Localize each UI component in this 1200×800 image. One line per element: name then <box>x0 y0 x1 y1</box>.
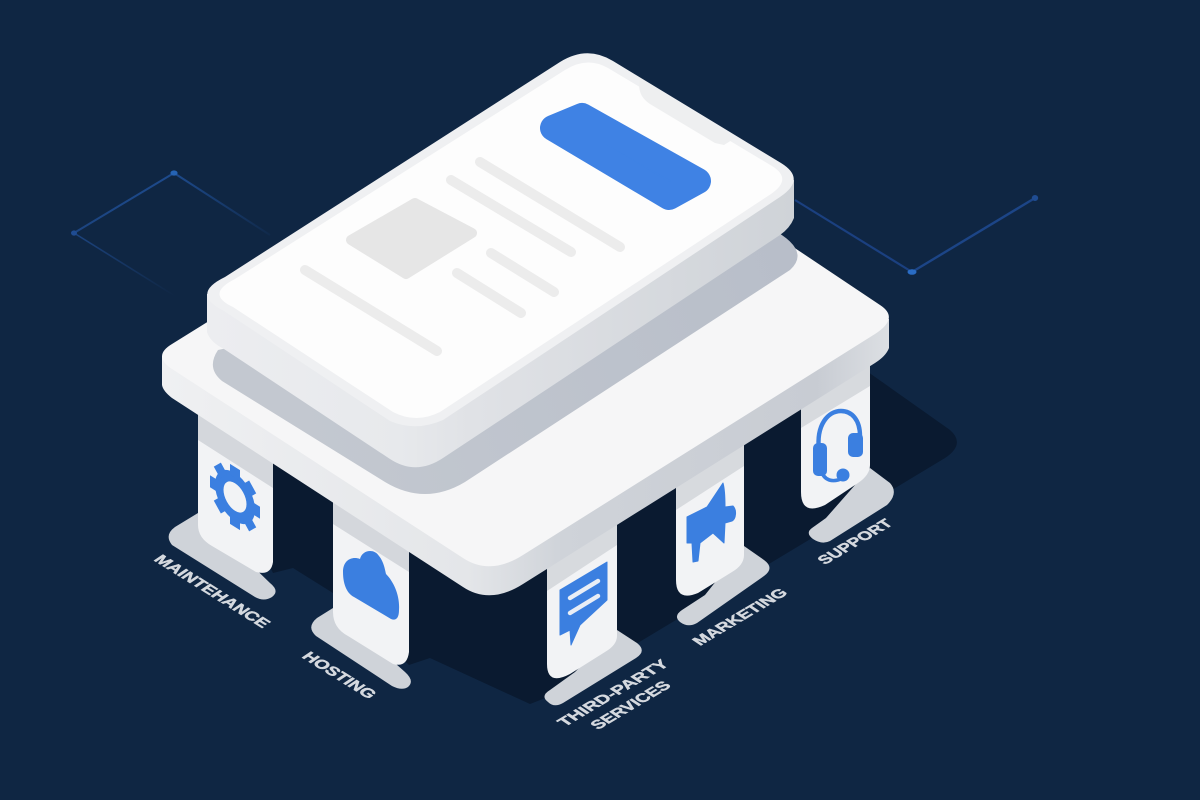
cast shadow on ground <box>198 372 957 704</box>
pillar shade: hosting <box>333 496 409 572</box>
phone top rim <box>207 53 794 426</box>
pillar body: third-party services <box>547 518 617 678</box>
pillar: third-party services <box>544 517 642 705</box>
foot slab: maintenance <box>169 513 276 600</box>
phone screen <box>219 62 782 418</box>
icon: megaphone <box>687 483 736 562</box>
pillar shade: maintenance <box>198 412 273 488</box>
left connector lines <box>71 170 270 296</box>
pillar: hosting <box>311 496 411 689</box>
label: hosting: HOSTING <box>298 650 380 702</box>
pillar body: maintenance <box>198 415 273 573</box>
icon: headset <box>813 411 863 482</box>
icon: chat bubble <box>560 562 607 645</box>
label: support: SUPPORT <box>814 517 897 567</box>
pillar shade: support <box>801 360 870 428</box>
foot slab: hosting <box>311 608 411 689</box>
icon: cloud <box>343 551 399 620</box>
foot slab: marketing <box>677 546 770 625</box>
label: marketing: MARKETING <box>689 586 792 648</box>
pillar body: marketing <box>676 441 744 596</box>
pillar body: support <box>801 362 870 508</box>
phone shadow on base <box>213 228 798 494</box>
base top face <box>162 97 889 566</box>
icon: gear <box>210 451 260 543</box>
phone notch <box>639 78 735 145</box>
label: third-party services: SERVICES <box>587 679 675 732</box>
content placeholder lines <box>305 162 620 351</box>
pillar: maintenance <box>169 412 276 600</box>
pillar shade: marketing <box>676 440 744 510</box>
label: maintenance: MAINTEHANCE <box>150 553 273 631</box>
image placeholder <box>351 203 472 274</box>
base platform <box>162 97 889 595</box>
pillar body: hosting <box>333 498 409 665</box>
pillar shade: third-party services <box>547 517 617 591</box>
label: third-party services: THIRD-PARTY <box>554 657 674 729</box>
foot slab: third-party services <box>544 630 642 705</box>
pillar: support <box>801 360 894 543</box>
foot slab: support <box>809 468 894 543</box>
blue button <box>553 116 698 197</box>
phone side <box>207 180 794 467</box>
pillar: marketing <box>676 440 770 625</box>
right connector lines <box>795 195 1038 275</box>
phone <box>207 53 794 467</box>
base side <box>162 319 889 595</box>
